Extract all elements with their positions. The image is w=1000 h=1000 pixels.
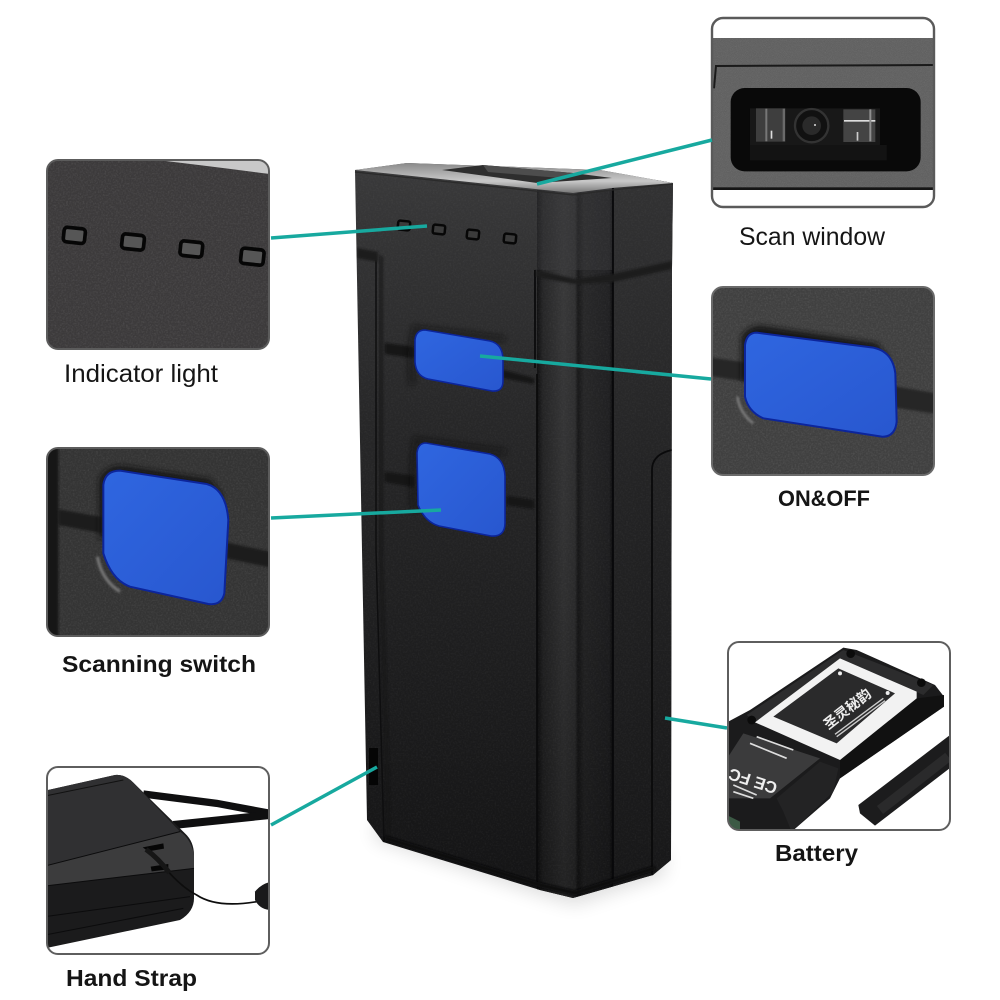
chamfer upper part: [537, 183, 613, 270]
battery cradle: [725, 648, 944, 832]
connector line: on and off: [480, 356, 711, 379]
window opening: [731, 88, 921, 171]
rear sticker: [725, 733, 820, 798]
connector line: hand strap: [271, 767, 377, 825]
left seam lines: [376, 256, 384, 842]
panel: battery: CE FC: [726, 764, 780, 798]
panel: hand strap: [45, 767, 272, 954]
cord clip: [254, 882, 268, 910]
scan opening: [442, 165, 612, 183]
recess shading: [411, 328, 505, 385]
device corner: [45, 775, 194, 948]
top face: [355, 163, 673, 193]
connector line: indicator light: [271, 226, 427, 238]
center lens: [795, 109, 828, 142]
thin cord: [168, 872, 257, 904]
connector line: scanning switch: [271, 510, 441, 518]
groove strips: [385, 343, 534, 509]
band seam: [536, 261, 672, 284]
left lens: [756, 108, 785, 142]
strap slot: [369, 748, 378, 785]
strap slots: [143, 843, 168, 871]
chamfer seams: [535, 270, 537, 885]
label: scan window: Scan window: [739, 223, 886, 251]
label: battery: Battery: [775, 840, 858, 866]
power button: [415, 330, 503, 391]
connector line: scan window: [537, 140, 712, 184]
panel: indicator light: [47, 159, 270, 349]
scan button: [417, 443, 505, 536]
panel: battery: [725, 642, 952, 832]
connector line: battery: [665, 718, 727, 728]
battery label: [755, 658, 917, 760]
right side face: [613, 180, 675, 900]
panel: scanning switch: [45, 445, 270, 638]
bottom edge: [385, 838, 655, 893]
corner chamfer: [537, 190, 613, 900]
label: hand strap: Hand Strap: [66, 965, 197, 991]
surface texture: [355, 165, 675, 900]
label: on and off: ON&OFF: [778, 486, 870, 511]
panel: scan window: [710, 18, 937, 207]
panel: on and off button: [711, 287, 937, 475]
battery cover: [858, 735, 952, 826]
panel: battery: 圣灵秘韵: [820, 685, 874, 732]
label: indicator light: Indicator light: [64, 360, 218, 388]
indicator lights: [398, 220, 516, 244]
lanyard: [143, 794, 270, 813]
right lens: [843, 109, 875, 142]
label: scanning switch: Scanning switch: [62, 651, 256, 677]
scanner device: [355, 163, 675, 905]
